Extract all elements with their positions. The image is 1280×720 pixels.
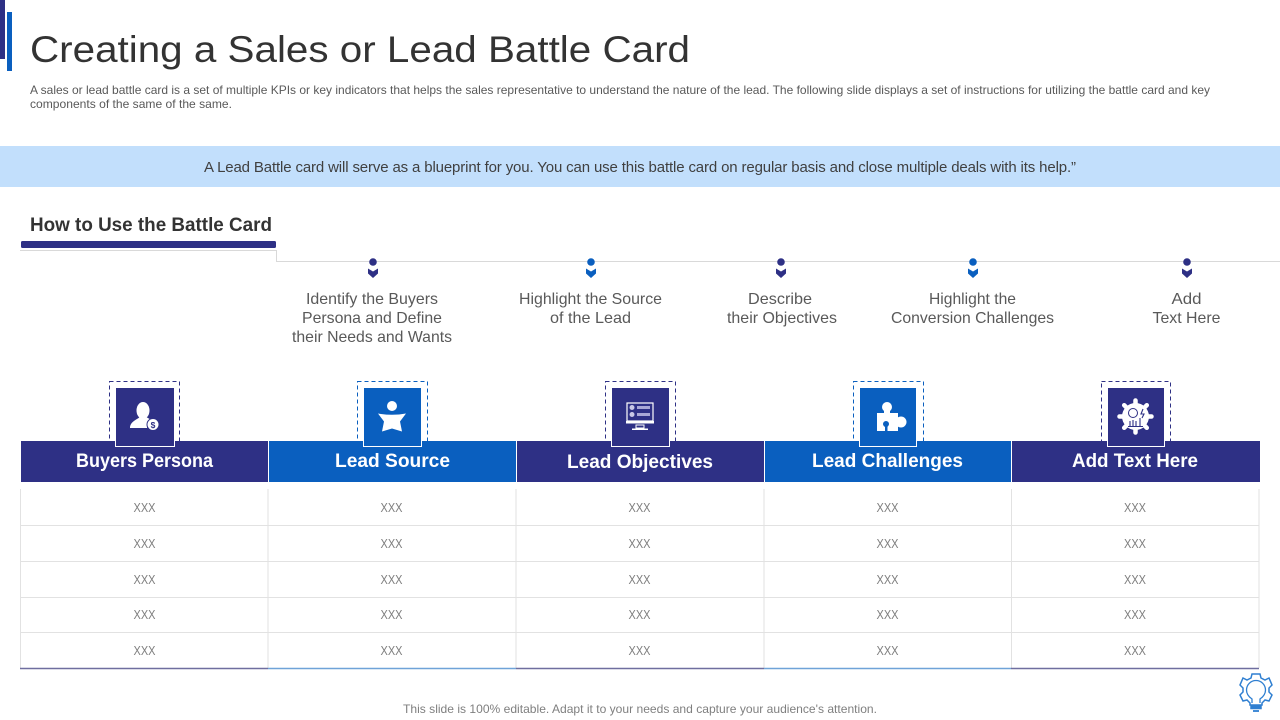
column: Lead Challenges: Lead Challenges — [812, 451, 963, 472]
icon: persona with dollar — [130, 402, 159, 430]
table column 4 values: XXX — [876, 537, 899, 551]
table column 4 values: XXX — [876, 608, 899, 622]
table column 4 values: XXX — [876, 501, 899, 515]
table column 2 values: XXX — [380, 501, 403, 515]
table column 2 values: XXX — [380, 608, 403, 622]
banner — [0, 146, 1280, 187]
step 4: Highlight the — [929, 291, 1016, 308]
column: Add Text Here — [1012, 382, 1260, 482]
column: Add Text Here: Add Text Here — [1072, 451, 1198, 472]
column: Lead Objectives — [517, 382, 764, 482]
step 1: Identify the Buyers — [306, 291, 438, 308]
table column 5 values: XXX — [1124, 644, 1147, 658]
table column 4 values: XXX — [876, 573, 899, 587]
table column 2 values — [380, 501, 403, 658]
table column 5 values: XXX — [1124, 501, 1147, 515]
table column 3 values: XXX — [628, 501, 651, 515]
step 2: Highlight the Source — [519, 291, 662, 308]
step 2 — [519, 258, 662, 327]
table column 1 values: XXX — [134, 501, 156, 515]
step 3 — [727, 258, 837, 327]
step 5 — [1152, 258, 1221, 327]
table body — [20, 489, 1259, 668]
table column 5 values: XXX — [1124, 573, 1147, 587]
column: Lead Objectives: Lead Objectives — [567, 452, 713, 473]
column: Buyers Persona — [21, 382, 268, 482]
table column 1 values: XXX — [134, 608, 156, 622]
icon: monitor checklist — [626, 403, 654, 430]
footer note: This slide is 100% editable. Adapt it to your needs and capture your audience's attention. — [403, 702, 877, 716]
column: Buyers Persona: Buyers Persona — [76, 451, 213, 472]
table column 5 values — [1124, 501, 1147, 658]
step 4 — [891, 258, 1054, 327]
icon: persona with dollar: $ — [151, 420, 156, 430]
icon: gear with chart — [1120, 400, 1152, 432]
table column 3 values: XXX — [628, 644, 651, 658]
step 1: their Needs and Wants — [292, 329, 452, 346]
step 1: Persona and Define — [302, 310, 442, 327]
table column 3 values: XXX — [628, 573, 651, 587]
column: Lead Source — [269, 382, 516, 482]
table column 4 values — [876, 501, 899, 658]
step 3: their Objectives — [727, 310, 837, 327]
table column 1 values: XXX — [134, 644, 156, 658]
description text — [30, 83, 1210, 111]
section heading — [21, 215, 276, 248]
table column 2 values: XXX — [380, 537, 403, 551]
timeline line — [20, 250, 1280, 262]
icon: person star — [378, 401, 406, 432]
icon: puzzle piece — [877, 402, 906, 431]
section heading: How to Use the Battle Card — [30, 215, 272, 236]
step 3: Describe — [748, 291, 812, 308]
table column 3 values — [628, 501, 651, 658]
accent bars — [0, 0, 12, 71]
table column 5 values: XXX — [1124, 537, 1147, 551]
table column 1 values — [134, 501, 156, 658]
column: Lead Challenges — [765, 382, 1011, 482]
table column 2 values: XXX — [380, 644, 403, 658]
table column 1 values: XXX — [134, 573, 156, 587]
step 1 — [292, 258, 452, 346]
step 5: Add — [1172, 291, 1202, 308]
table column 3 values: XXX — [628, 608, 651, 622]
step 5: Text Here — [1152, 310, 1221, 327]
title: Creating a Sales or Lead Battle Card — [30, 29, 690, 70]
icon: lightbulb gear logo — [1240, 674, 1272, 711]
column: Lead Source: Lead Source — [335, 451, 450, 472]
table column 2 values: XXX — [380, 573, 403, 587]
banner: A Lead Battle card will serve as a blueprint for you. You can use this battle card on regular basis and close multiple deals with its help.” — [204, 159, 1076, 176]
step 4: Conversion Challenges — [891, 310, 1054, 327]
table column 3 values: XXX — [628, 537, 651, 551]
table column 1 values: XXX — [134, 537, 156, 551]
description text: A sales or lead battle card is a set of multiple KPIs or key indicators that helps the sales representative to understand the nature of the lead. The following slide displays a set of instructions for utilizing the battle card and key — [30, 83, 1210, 97]
table column 4 values: XXX — [876, 644, 899, 658]
description text: components of the same of the same. — [30, 97, 232, 111]
table column 5 values: XXX — [1124, 608, 1147, 622]
step 2: of the Lead — [550, 310, 631, 327]
